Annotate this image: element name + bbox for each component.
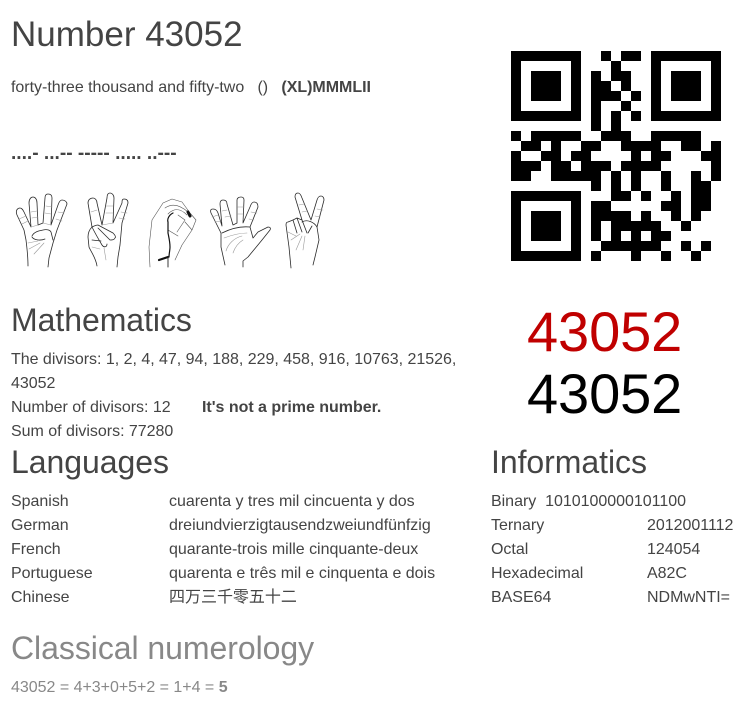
informatics table: 2012001112: [647, 517, 733, 534]
heading: informatics: Informatics: [491, 444, 647, 480]
languages table: dreiundvierzigtausendzweiundfünfzig: [169, 517, 431, 534]
heading: mathematics: Mathematics: [11, 302, 192, 338]
informatics table: Ternary: [491, 517, 544, 534]
morse code: ....- ...-- ----- ..... ..---: [11, 143, 177, 164]
languages table: Spanish: [11, 493, 69, 510]
hand: five: [211, 197, 270, 267]
informatics table: [491, 493, 733, 606]
languages table: German: [11, 517, 69, 534]
informatics table: Hexadecimal: [491, 565, 583, 582]
finder: bottom left: [511, 191, 581, 261]
divisors list continued: 43052: [11, 375, 55, 392]
hand: four: [16, 194, 67, 267]
heading: classical numerology: Classical numerology: [11, 630, 314, 666]
data modules: [511, 51, 721, 261]
informatics table: NDMwNTI=: [647, 589, 730, 606]
languages table: 四万三千零五十二: [169, 589, 297, 606]
informatics table: BASE64: [491, 589, 551, 606]
number of divisors: Number of divisors: 12: [11, 399, 171, 416]
number in words and roman numeral: forty-three thousand and fifty-two () (XL)MMMLII: [11, 79, 371, 96]
heading: languages: Languages: [11, 444, 169, 480]
informatics table: 124054: [647, 541, 700, 558]
informatics table: Octal: [491, 541, 528, 558]
languages table: quarenta e três mil e cinquenta e dois: [169, 565, 435, 582]
icon: sign language hands: [16, 192, 324, 268]
informatics table: Binary 1010100000101100: [491, 493, 686, 510]
languages table: quarante-trois mille cinquante-deux: [169, 541, 418, 558]
hand: two: [286, 193, 324, 268]
informatics table: A82C: [647, 565, 687, 582]
big number: red: 43052: [527, 300, 682, 363]
sum of divisors: Sum of divisors: 77280: [11, 423, 173, 440]
prime status: It's not a prime number.: [202, 399, 381, 416]
languages table: cuarenta y tres mil cincuenta y dos: [169, 493, 415, 510]
languages table: [11, 493, 435, 606]
divisors list: The divisors: 1, 2, 4, 47, 94, 188, 229, 458, 916, 10763, 21526,: [11, 351, 456, 368]
languages table: French: [11, 541, 61, 558]
QR code: [511, 51, 721, 261]
languages table: Portuguese: [11, 565, 93, 582]
big number: black: 43052: [527, 362, 682, 425]
hand: zero: [149, 199, 196, 267]
finder: top right: [651, 51, 721, 121]
finder: top left: [511, 51, 581, 121]
languages table: Chinese: [11, 589, 70, 606]
numerology calculation: 43052 = 4+3+0+5+2 = 1+4 = 5: [11, 679, 228, 696]
title: Number 43052: [11, 15, 243, 54]
hand: three: [88, 193, 128, 267]
